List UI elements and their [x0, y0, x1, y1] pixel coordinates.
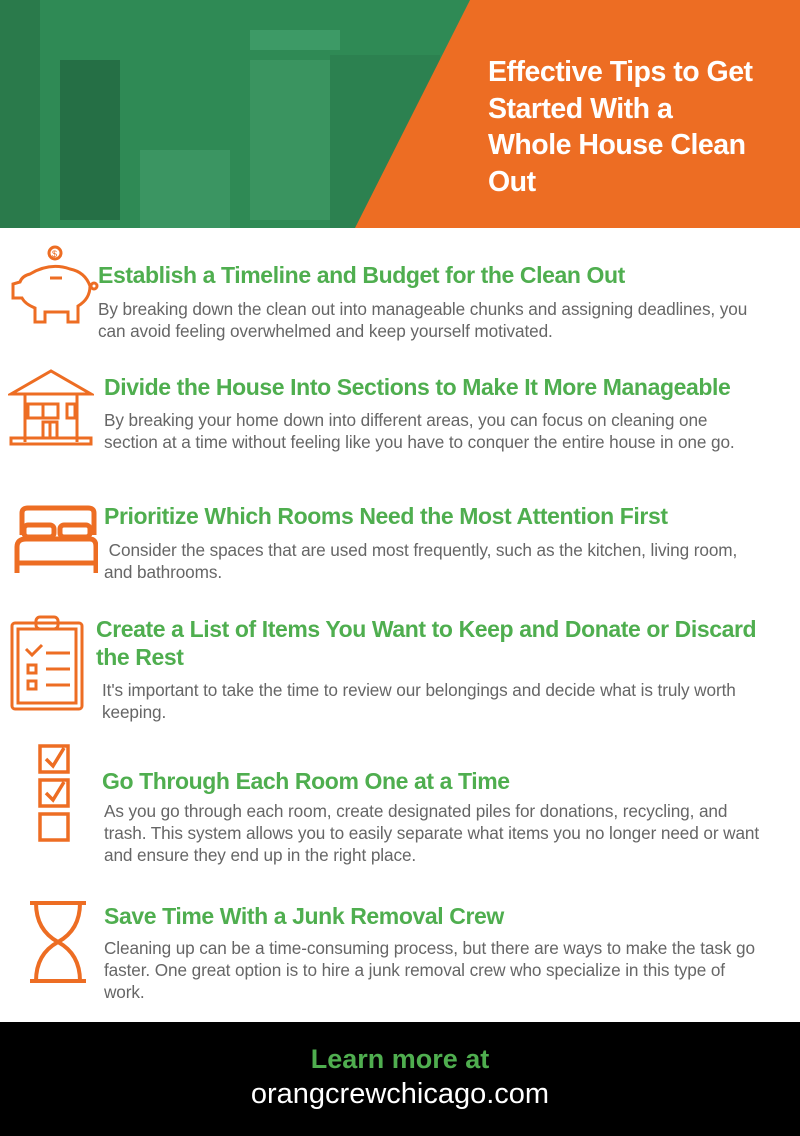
icon: checkboxes	[38, 744, 70, 842]
tip 4 text: keeping.	[102, 702, 166, 722]
tip 3 heading: Prioritize Which Rooms Need the Most Attention First	[104, 503, 668, 529]
tip 4 heading: Create a List of Items You Want to Keep and Donate or Discard	[96, 616, 756, 642]
tip 5 text	[104, 801, 759, 865]
tip 4 text	[102, 680, 736, 722]
tip 5 text: and ensure they end up in the right place.	[104, 845, 416, 865]
header banner	[0, 0, 800, 228]
tip 6 heading: Save Time With a Junk Removal Crew	[104, 903, 504, 929]
tip 4 heading	[96, 616, 756, 670]
tip 4 text: It's important to take the time to review our belongings and decide what is truly worth	[102, 680, 736, 700]
tip 6 text: faster. One great option is to hire a junk removal crew who specialize in this type of	[104, 960, 725, 980]
title: Whole House Clean	[488, 129, 746, 161]
tip 4 heading: the Rest	[96, 644, 184, 670]
tip 1 text: By breaking down the clean out into manageable chunks and assigning deadlines, you	[98, 299, 747, 319]
icon: piggy bank: $	[52, 249, 57, 259]
title: Out	[488, 166, 536, 198]
footer heading: Learn more at	[311, 1044, 489, 1074]
tip 2 heading: Divide the House Into Sections to Make It More Manageable	[104, 374, 730, 400]
tip 1 text	[98, 299, 747, 341]
footer url: orangcrewchicago.com	[251, 1078, 549, 1110]
tip 2 text: By breaking your home down into different areas, you can focus on cleaning one	[104, 410, 707, 430]
icon: piggy bank	[12, 246, 98, 324]
footer	[0, 1022, 800, 1136]
icon: bed	[14, 506, 98, 573]
tip 1 heading: Establish a Timeline and Budget for the Clean Out	[98, 262, 625, 288]
tip 3 text: and bathrooms.	[104, 562, 222, 582]
tip 3 text	[104, 540, 737, 582]
icon: hourglass	[30, 901, 86, 983]
icon: house	[8, 369, 94, 446]
tip 3 text: Consider the spaces that are used most frequently, such as the kitchen, living room,	[109, 540, 737, 560]
tip 6 text: Cleaning up can be a time-consuming process, but there are ways to make the task go	[104, 938, 755, 958]
title: Started With a	[488, 92, 672, 124]
title	[488, 56, 753, 198]
tip 5 text: As you go through each room, create designated piles for donations, recycling, and	[104, 801, 727, 821]
tip 1 text: can avoid feeling overwhelmed and keep yourself motivated.	[98, 321, 553, 341]
tip 2 text: section at a time without feeling like you have to conquer the entire house in one go.	[104, 432, 735, 452]
tip 5 heading: Go Through Each Room One at a Time	[102, 768, 510, 794]
tip 2 text	[104, 410, 735, 452]
tip 6 text: work.	[104, 982, 145, 1002]
tip 6 text	[104, 938, 755, 1002]
title: Effective Tips to Get	[488, 56, 753, 88]
tip 5 text: trash. This system allows you to easily separate what items you no longer need or want	[104, 823, 759, 843]
icon: clipboard checklist	[10, 616, 84, 710]
